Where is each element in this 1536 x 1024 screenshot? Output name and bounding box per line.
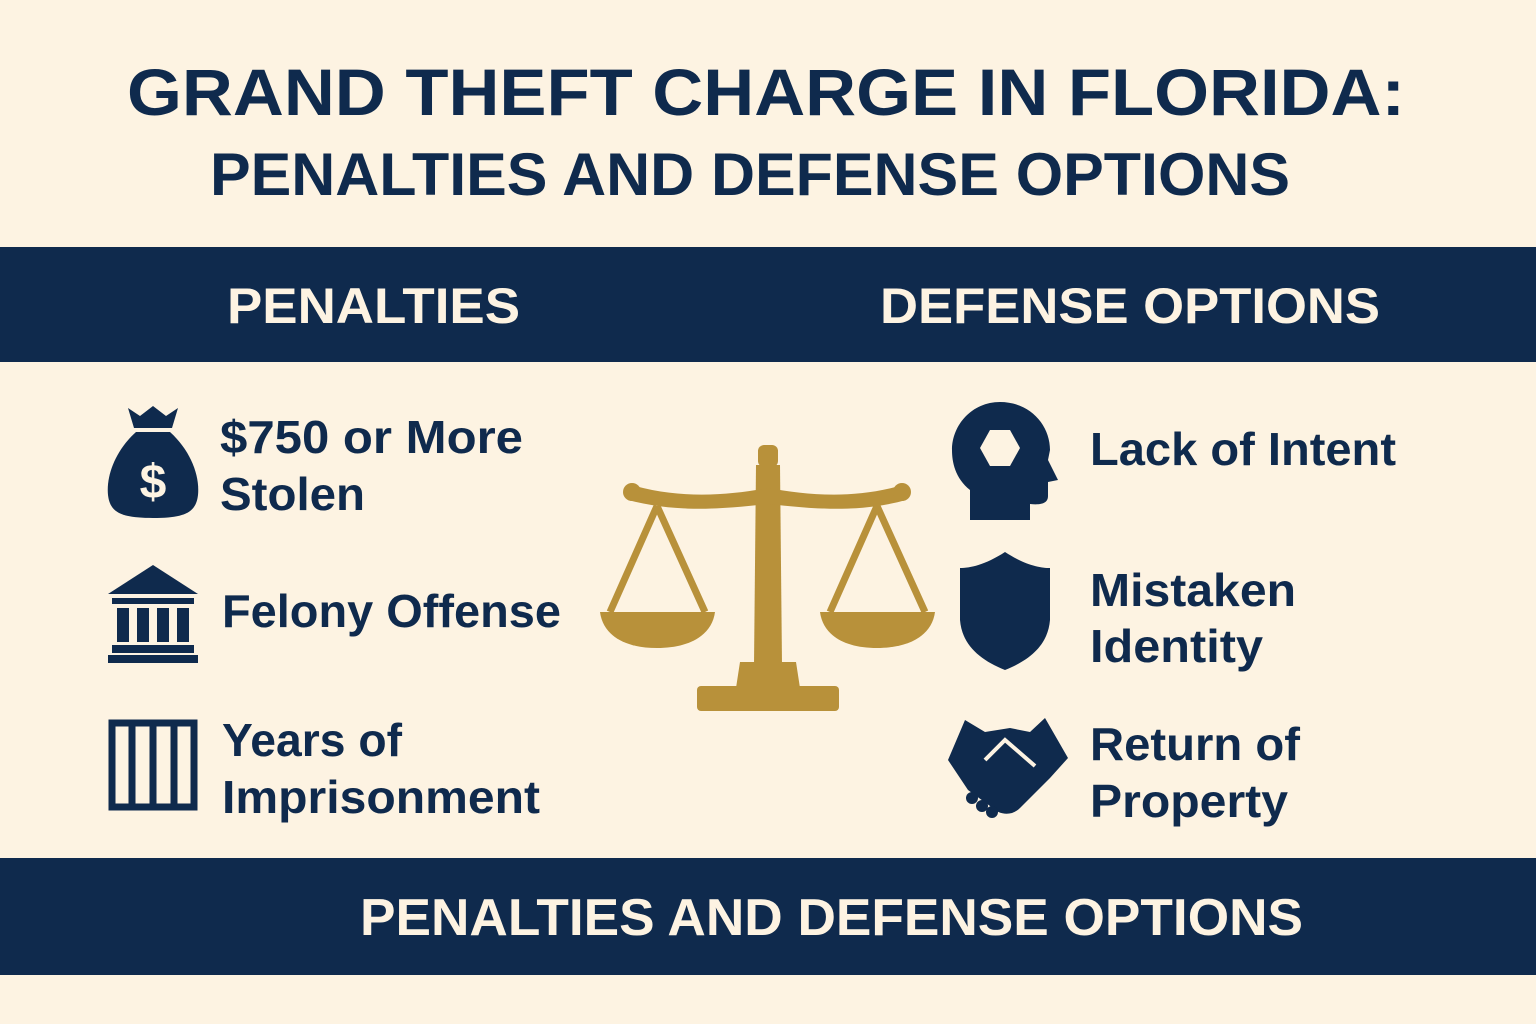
footer band: PENALTIES AND DEFENSE OPTIONS — [360, 889, 1303, 947]
icon: money bag — [108, 406, 198, 518]
title: GRAND THEFT CHARGE IN FLORIDA: — [127, 55, 1405, 129]
icon: handshake — [948, 718, 1068, 818]
footer band — [0, 858, 1536, 975]
text: $750 or more stolen: $750 or More — [220, 411, 523, 463]
text: return of property: Property — [1090, 775, 1288, 827]
icon: head — [952, 402, 1058, 520]
text: years of imprisonment: Imprisonment — [222, 771, 540, 823]
text: years of imprisonment — [222, 714, 540, 823]
text: years of imprisonment: Years of — [222, 714, 403, 766]
heading: penalties: PENALTIES — [227, 278, 520, 334]
text: lack of intent: Lack of Intent — [1090, 423, 1396, 475]
text: return of property: Return of — [1090, 718, 1301, 770]
icon: shield — [960, 552, 1050, 670]
text: mistaken identity: Mistaken — [1090, 564, 1296, 616]
title — [127, 55, 1405, 208]
text: return of property — [1090, 718, 1301, 827]
title: PENALTIES AND DEFENSE OPTIONS — [210, 141, 1290, 208]
text: mistaken identity — [1090, 564, 1296, 672]
text: $750 or more stolen: Stolen — [220, 468, 365, 520]
icon: courthouse — [108, 565, 198, 663]
text: mistaken identity: Identity — [1090, 620, 1263, 672]
icon: money bag: $ — [140, 456, 167, 509]
header band — [0, 247, 1536, 362]
text: felony offense: Felony Offense — [222, 585, 561, 637]
icon: prison bars — [112, 723, 194, 807]
heading: defense options: DEFENSE OPTIONS — [880, 278, 1380, 334]
icon: scales of justice — [600, 445, 935, 711]
text: $750 or more stolen — [220, 411, 523, 520]
